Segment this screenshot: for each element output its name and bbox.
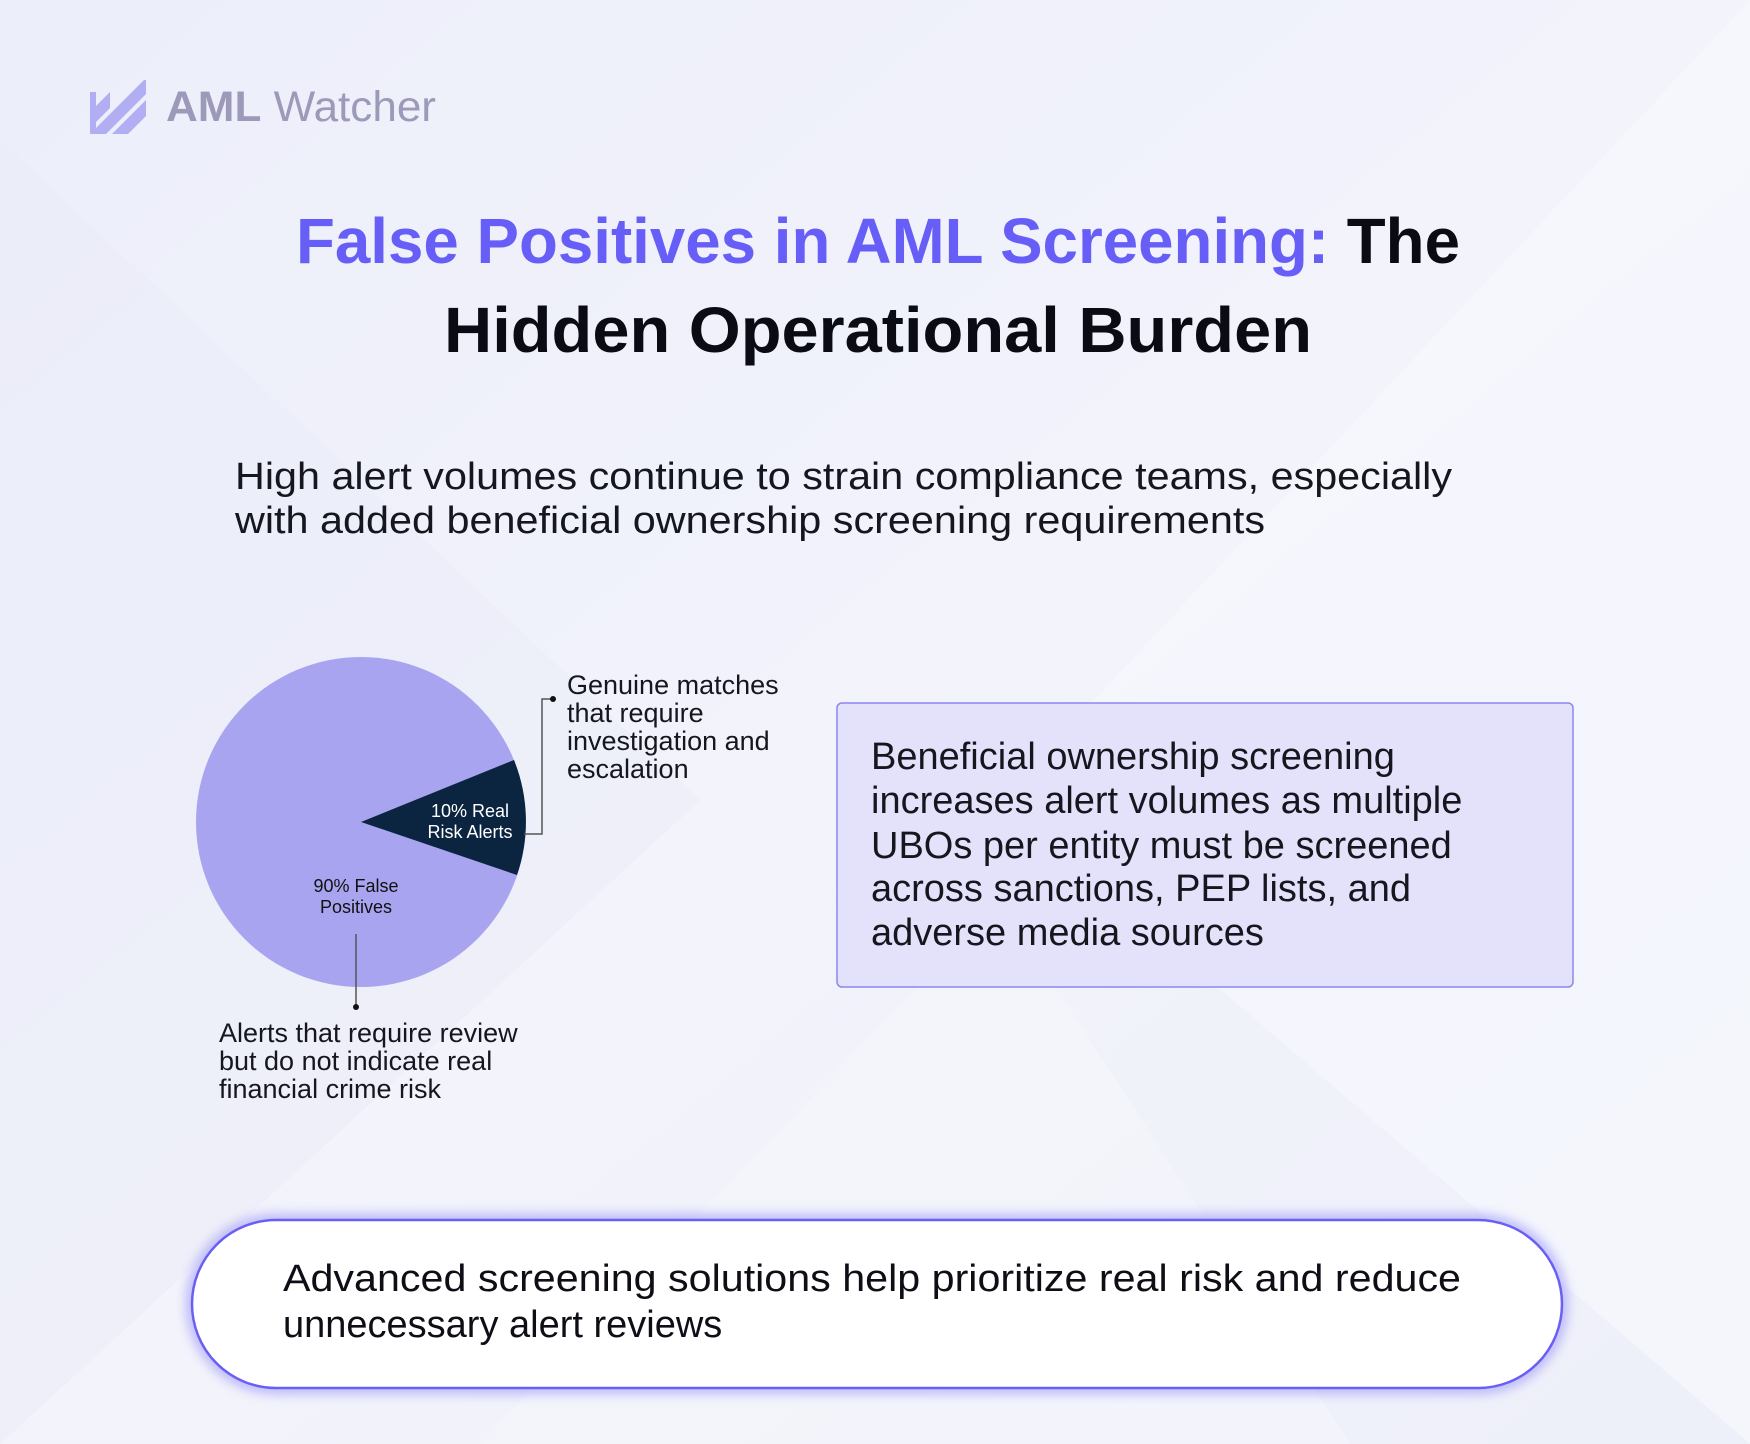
subtitle: High alert volumes continue to strain compliance teams, especially	[235, 456, 1452, 498]
callout: false positives	[219, 934, 518, 1104]
callout: false positives: but do not indicate real	[219, 1046, 492, 1076]
subtitle	[234, 456, 1452, 542]
callout: false positives: financial crime risk	[219, 1074, 442, 1104]
slice: 10% real risk alerts	[361, 760, 526, 875]
pie chart	[196, 657, 526, 987]
panel: beneficial ownership: across sanctions, PEP lists, and	[871, 868, 1411, 910]
title: Hidden Operational Burden	[444, 294, 1312, 366]
callout: genuine matches	[524, 670, 779, 834]
pie chart: 10% Real	[431, 801, 509, 821]
callout: genuine matches: that require	[567, 698, 704, 728]
callout: bottom conclusion pill: Advanced screening solutions help prioritize real risk and reduce	[283, 1258, 1461, 1300]
icon: logo stripes	[90, 80, 146, 134]
subtitle: with added beneficial ownership screening requirements	[234, 500, 1265, 542]
callout: genuine matches: escalation	[567, 754, 689, 784]
logo	[90, 80, 436, 134]
panel: beneficial ownership: adverse media sources	[871, 912, 1264, 954]
panel: beneficial ownership: increases alert volumes as multiple	[871, 780, 1462, 822]
panel: beneficial ownership: UBOs per entity must be screened	[871, 825, 1452, 867]
callout: genuine matches: investigation and	[567, 726, 770, 756]
pie chart: Risk Alerts	[427, 822, 513, 842]
title: False Positives in AML Screening: The	[296, 205, 1460, 277]
callout: bottom conclusion pill	[192, 1220, 1562, 1388]
logo: AML Watcher	[166, 83, 436, 131]
slice: 90% false positives	[196, 657, 526, 987]
panel: beneficial ownership	[837, 703, 1573, 987]
pie chart: Positives	[320, 897, 392, 917]
callout: genuine matches: Genuine matches	[567, 670, 779, 700]
pie chart: 90% False	[313, 876, 399, 896]
callout: false positives: Alerts that require review	[219, 1018, 518, 1048]
title	[296, 205, 1460, 366]
panel: beneficial ownership: Beneficial ownership screening	[871, 736, 1395, 778]
callout: bottom conclusion pill: unnecessary alert reviews	[283, 1304, 722, 1346]
